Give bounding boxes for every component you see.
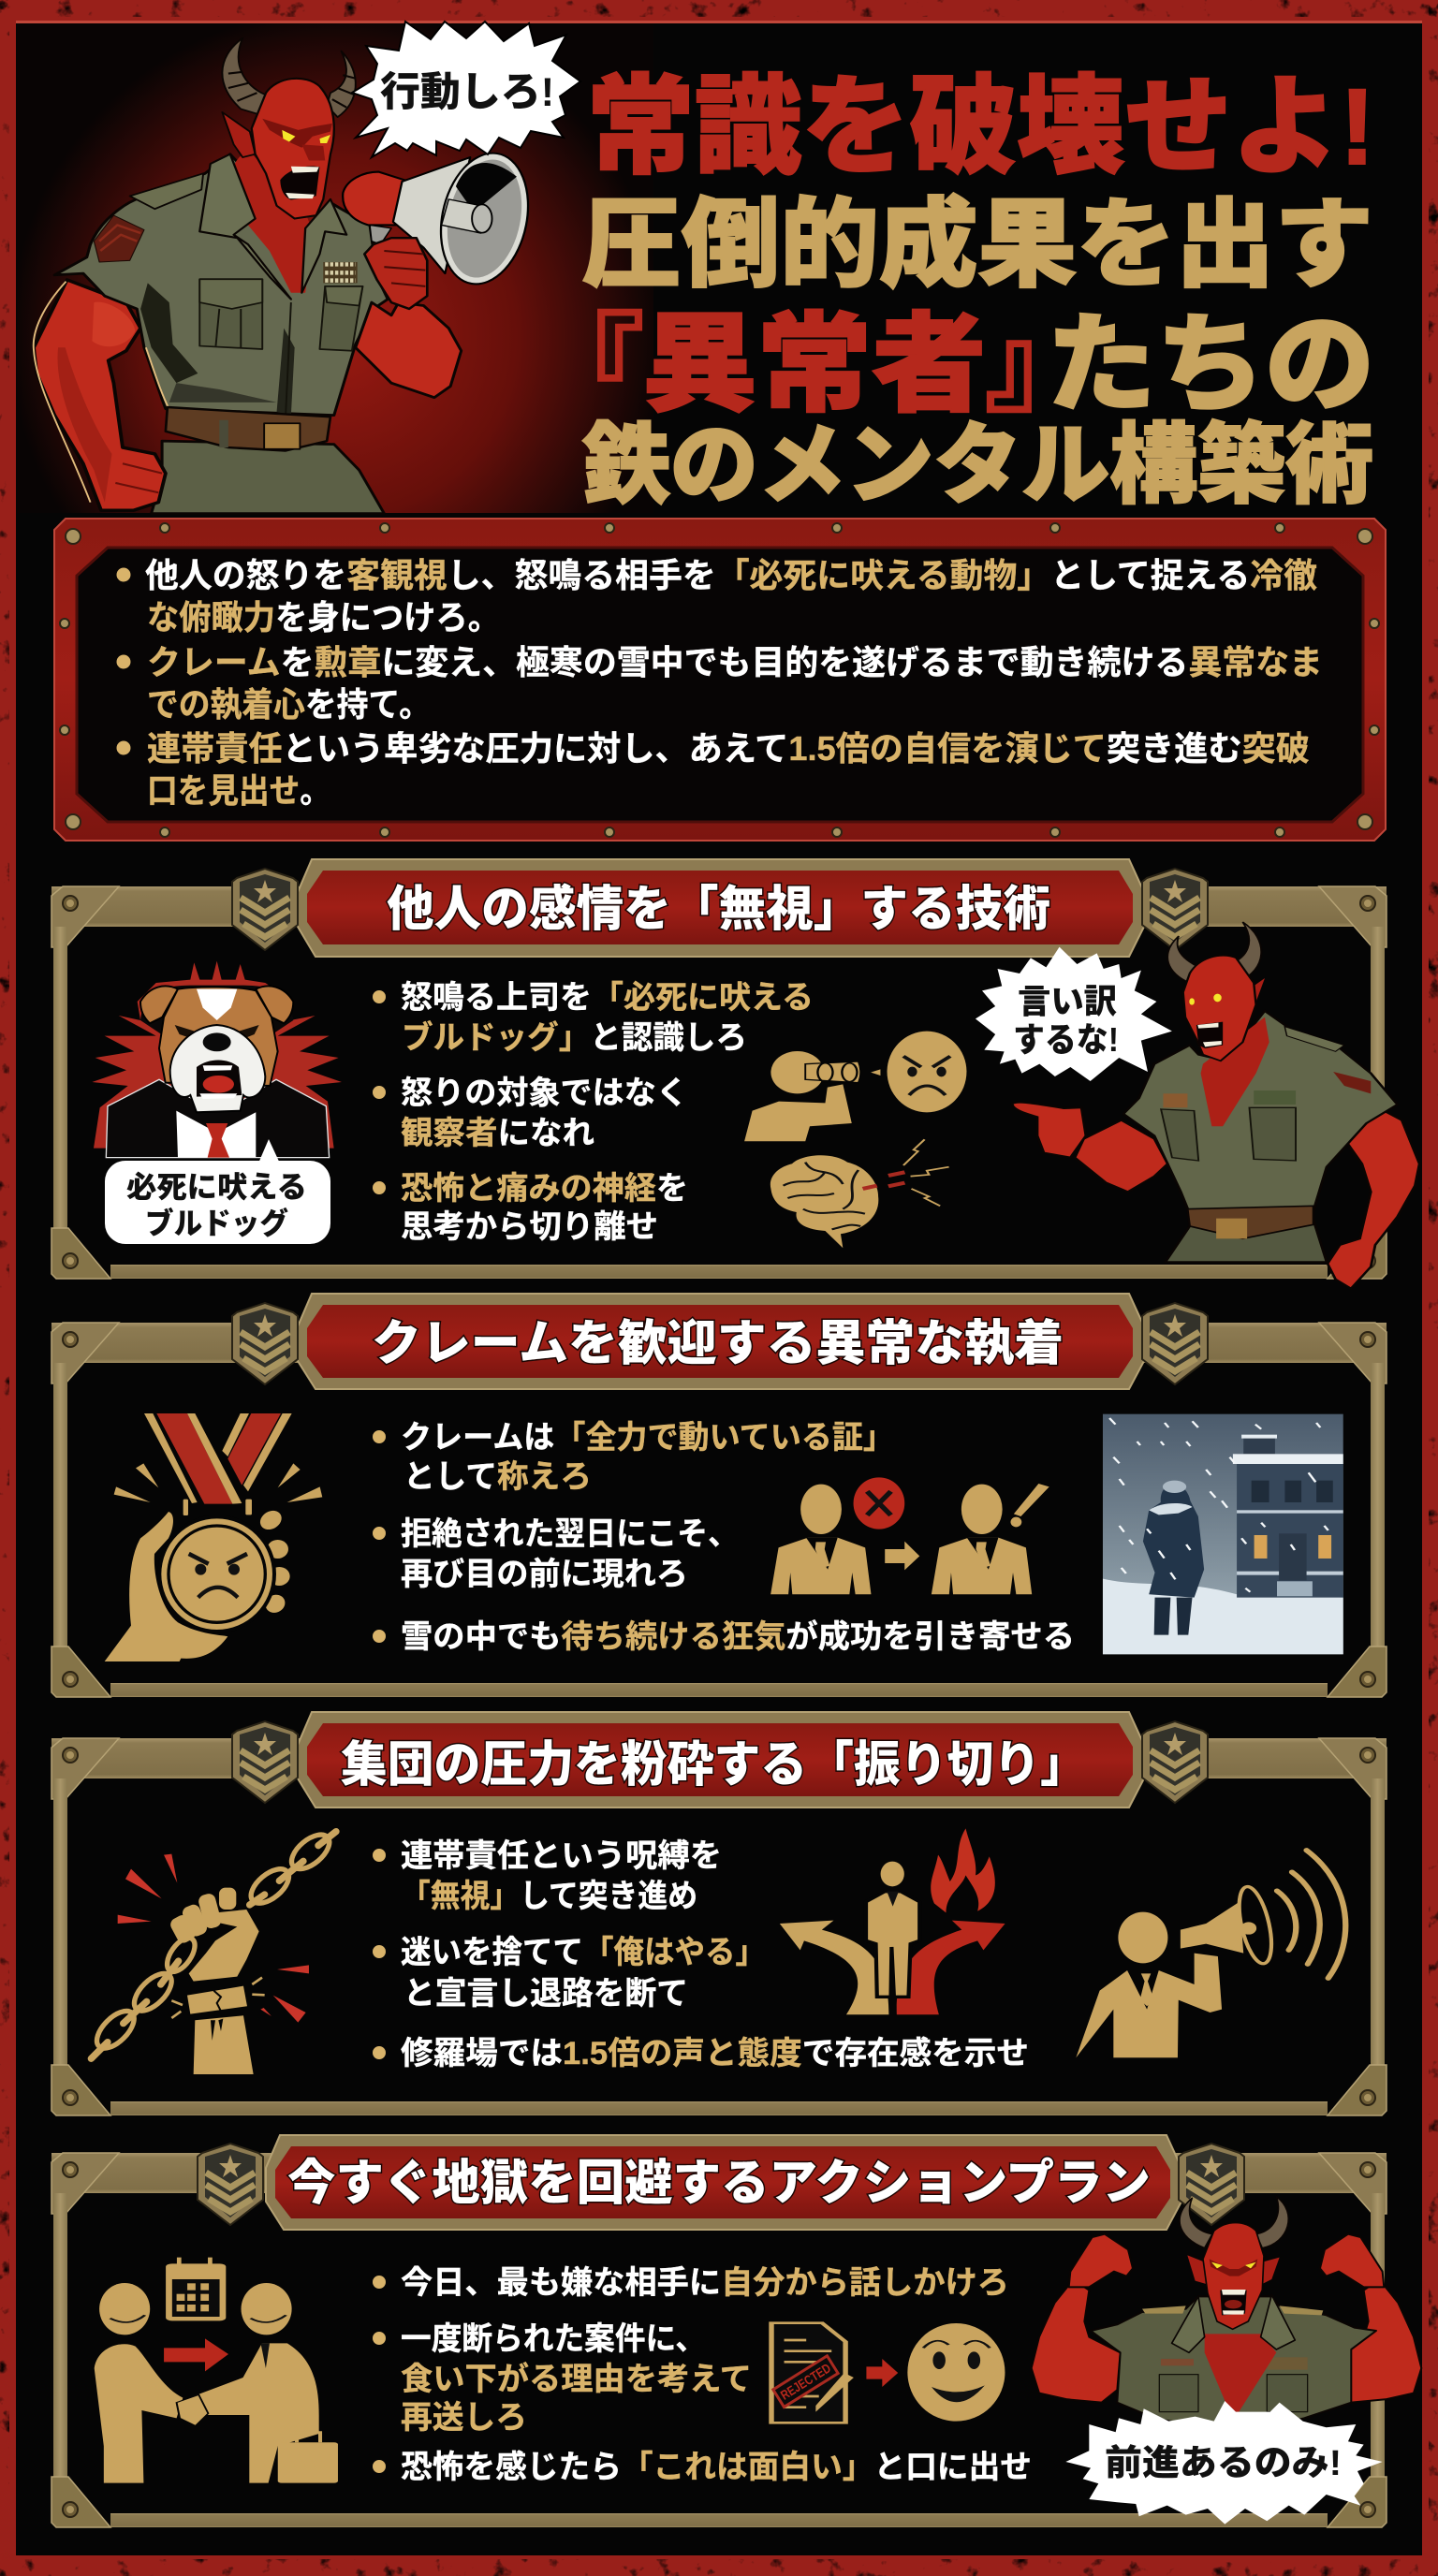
summary text: 口を見出せ。 xyxy=(147,771,330,810)
title xyxy=(582,67,1375,514)
icon: rejected person xyxy=(770,1485,871,1594)
panel 3 heading banner xyxy=(232,1712,1208,1808)
panel 3 bullets xyxy=(373,1838,1029,2071)
speech burst: 行動しろ!: 行動しろ! xyxy=(380,70,554,115)
panel 2 bullets: 雪の中でも待ち続ける狂気が成功を引き寄せる xyxy=(401,1618,1075,1655)
panel 2: welcoming complaints xyxy=(51,1294,1387,1697)
illustration: devil flexing xyxy=(1032,2197,1421,2434)
panel 4 bullets: 再送しろ xyxy=(401,2400,527,2436)
illustration: devil shouting into megaphone xyxy=(34,38,539,514)
speech burst: 行動しろ! xyxy=(352,22,580,157)
summary text xyxy=(145,556,1323,810)
summary text: 連帯責任という卑劣な圧力に対し、あえて1.5倍の自信を演じて突き進む突破 xyxy=(147,729,1310,768)
icon: barking bulldog xyxy=(92,961,342,1158)
panel 2 bullets: として称えろ xyxy=(404,1459,592,1495)
panel 1 heading banner xyxy=(232,859,1208,957)
devil pointing: neck and chest xyxy=(1201,1017,1269,1126)
devil shirt xyxy=(54,154,388,416)
panel 2 heading banner: クレームを歓迎する異常な執着 xyxy=(372,1317,1064,1371)
icon: angry face xyxy=(871,1032,966,1112)
devil pants xyxy=(152,441,384,514)
panel 2 bullets: 再び目の前に現れろ xyxy=(401,1557,688,1592)
devil pointing: shirt xyxy=(1123,1011,1398,1214)
devil shirt pockets and medals xyxy=(199,262,362,416)
icon: person with megaphone xyxy=(1076,1851,1345,2057)
panel 4: action plan xyxy=(51,2135,1421,2527)
devil flexing: collar xyxy=(1172,2295,1295,2352)
devil horns xyxy=(222,38,356,117)
panel 4 bullets: 今日、最も嫌な相手に自分から話しかけろ xyxy=(401,2265,1009,2301)
devil flexing: horns xyxy=(1180,2197,1288,2248)
panel 2 bullets: クレームは「全力で動いている証」 xyxy=(401,1420,894,1456)
speech burst: 言い訳するな! xyxy=(976,947,1172,1081)
title: 圧倒的成果を出す xyxy=(582,191,1373,300)
summary text: 他人の怒りを客観視し、怒鳴る相手を「必死に吠える動物」として捉える冷徹 xyxy=(145,556,1317,594)
speech burst: 前進あるのみ! xyxy=(1065,2401,1383,2525)
panel 4 heading banner xyxy=(198,2135,1244,2230)
panel 3 bullets: 「無視」して突き進め xyxy=(401,1879,697,1914)
icon: determined person xyxy=(932,1484,1049,1594)
devil pointing: belt xyxy=(1187,1206,1313,1238)
panel 2 bullets xyxy=(373,1420,1075,1655)
speech burst: 言い訳するな!: 言い訳 xyxy=(1018,982,1117,1020)
summary bullets xyxy=(117,568,130,754)
panel 1 bullets: 観察者になれ xyxy=(401,1116,594,1151)
summary rivets xyxy=(60,523,1379,837)
icon: rejected person to determined person xyxy=(770,1414,1343,1654)
callout: 必死に吠えるブルドッグ xyxy=(105,1139,330,1244)
speech burst: 前進あるのみ!: 前進あるのみ! xyxy=(1105,2444,1342,2483)
callout: 必死に吠えるブルドッグ: ブルドッグ xyxy=(145,1207,288,1240)
summary text: での執着心を持て。 xyxy=(147,685,431,724)
panel 4 frame xyxy=(51,2153,1387,2527)
panel 1 bullets xyxy=(373,980,814,1245)
panel 3 bullets: 迷いを捨てて「俺はやる」 xyxy=(401,1935,766,1970)
devil head xyxy=(252,79,334,219)
icon: red X xyxy=(854,1477,904,1530)
header red backdrop xyxy=(17,23,653,513)
speech burst: 言い訳するな!: するな! xyxy=(1013,1020,1119,1059)
panel 3 heading banner: 集団の圧力を粉砕する「振り切り」 xyxy=(341,1738,1087,1793)
panel 3 bullets: と宣言し退路を断て xyxy=(404,1976,688,2012)
devil fist on megaphone xyxy=(364,238,427,309)
megaphone xyxy=(343,147,539,290)
panel 4 bullets: 恐怖を感じたら「これは面白い」と口に出せ xyxy=(401,2450,1032,2485)
icon: handshake with calendar xyxy=(95,2258,338,2483)
devil collar xyxy=(199,154,346,300)
summary text: な俯瞰力を身につけろ。 xyxy=(147,598,500,637)
devil pointing: pointing arm xyxy=(1012,1103,1167,1192)
summary text: クレームを勲章に変え、極寒の雪中でも目的を遂げるまで動き続ける異常なま xyxy=(147,643,1323,681)
icon: rejected document to smile xyxy=(771,2323,1005,2422)
devil flexing: right arm xyxy=(1320,2234,1421,2403)
panel 1 bullets: 恐怖と痛みの神経を xyxy=(401,1171,688,1207)
icon: brain xyxy=(770,1139,949,1248)
panel 1 bullets: 思考から切り離せ xyxy=(401,1209,658,1245)
devil flexing: head xyxy=(1187,2223,1280,2329)
icon: arrow xyxy=(885,1542,919,1570)
panel 4 bullets: 食い下がる理由を考えて xyxy=(401,2361,752,2397)
devil flexing: shirt xyxy=(1091,2296,1376,2434)
panel 1: ignoring emotions xyxy=(51,859,1419,1289)
icon: medal in hand xyxy=(105,1413,322,1661)
panel 2 frame xyxy=(51,1323,1387,1697)
panel 2 bullets: 拒絶された翌日にこそ、 xyxy=(401,1516,739,1552)
icon: flame xyxy=(931,1828,995,1912)
icons: crossroads and megaphone xyxy=(780,1828,1345,2057)
devil flexing: left arm xyxy=(1032,2234,1133,2403)
panel 1 frame xyxy=(51,886,1387,1279)
devil pointing: right arm xyxy=(1328,1111,1419,1289)
devil pointing: head xyxy=(1183,956,1265,1061)
icon: rejected document to smile: REJECTED xyxy=(778,2360,833,2403)
panel 1 bullets: 怒鳴る上司を「必死に吠える xyxy=(401,980,814,1016)
panel 4 bullets xyxy=(373,2265,1032,2485)
title: たちの xyxy=(1047,305,1374,425)
devil neck and chest xyxy=(230,153,313,293)
panel 1 bullets: 怒りの対象ではなく xyxy=(401,1076,688,1111)
devil pointing: horns xyxy=(1167,922,1261,983)
icon: fist breaking chain xyxy=(91,1828,336,2074)
panel: summary xyxy=(54,519,1386,841)
title: 鉄のメンタル構築術 xyxy=(582,416,1373,514)
devil flexing: chest xyxy=(1205,2334,1276,2412)
icon: observer with binoculars xyxy=(744,1051,860,1141)
panel 3 bullets: 修羅場では1.5倍の声と態度で存在感を示せ xyxy=(401,2036,1029,2071)
callout: 必死に吠えるブルドッグ: 必死に吠える xyxy=(126,1170,307,1204)
title: 『異常者』 xyxy=(585,305,1044,425)
devil left arm xyxy=(34,280,166,510)
illustration: figure waiting in snow xyxy=(1103,1414,1343,1654)
panel 3 bullets: 連帯責任という呪縛を xyxy=(401,1838,722,1874)
title: 常識を破壊せよ! xyxy=(587,67,1375,187)
icon: person at crossroads xyxy=(780,1862,1005,2014)
devil raised right arm xyxy=(356,302,462,398)
panel 3: shaking off group pressure xyxy=(51,1712,1387,2115)
panel 1 heading banner: 他人の感情を「無視」する技術 xyxy=(387,883,1050,937)
panel 1 bullets: ブルドッグ」と認識しろ xyxy=(402,1019,747,1056)
devil belt xyxy=(166,407,330,450)
panel 3 frame xyxy=(51,1738,1387,2115)
devil ear xyxy=(222,112,256,157)
icons: observer, angry face, brain, devil pointing xyxy=(744,922,1419,1289)
panel 4 heading banner: 今すぐ地獄を回避するアクションプラン xyxy=(287,2157,1151,2211)
panel 2 heading banner xyxy=(232,1294,1208,1389)
devil pointing: pants xyxy=(1166,1220,1327,1262)
panel 4 bullets: 一度断られた案件に、 xyxy=(401,2321,706,2357)
